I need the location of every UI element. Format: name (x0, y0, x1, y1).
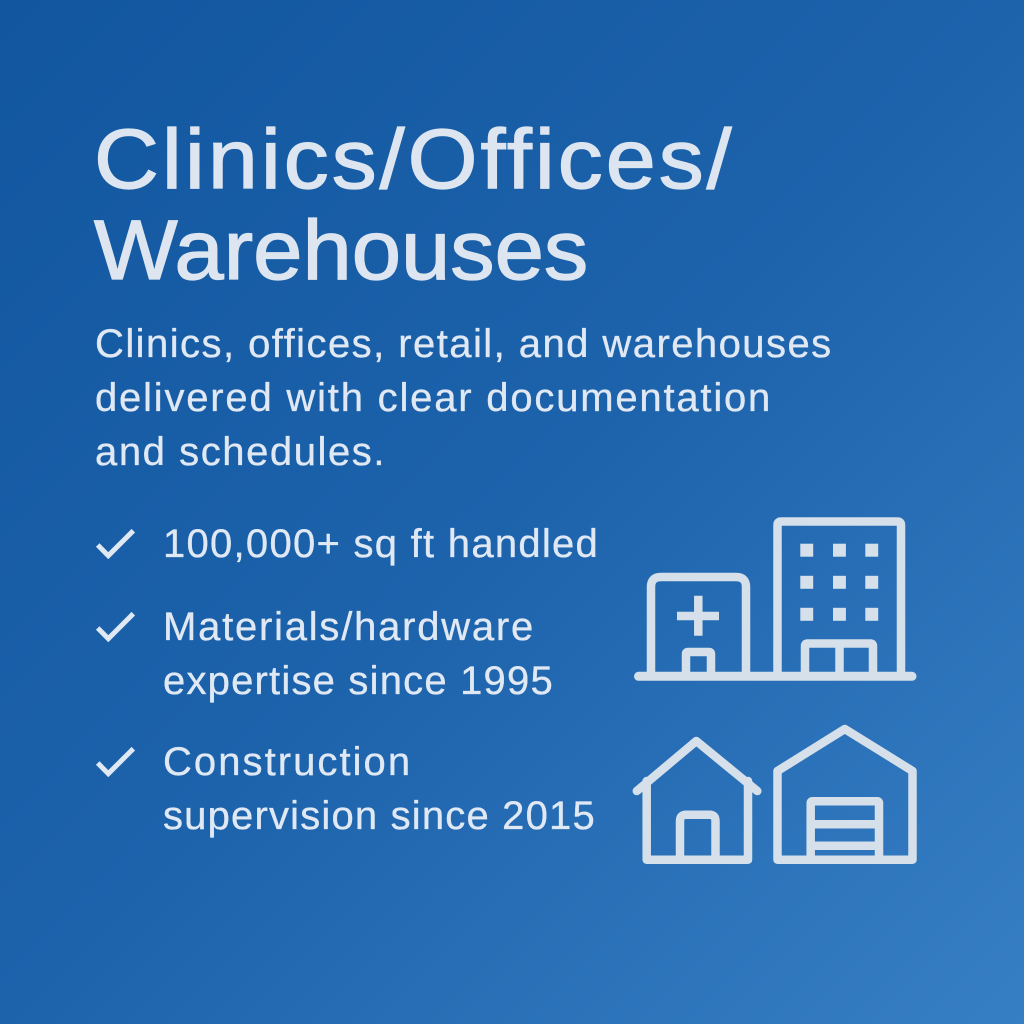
title: Clinics/Offices/ (94, 112, 735, 206)
description text: Clinics, offices, retail, and warehouses (95, 322, 833, 366)
icon: clinic (651, 577, 746, 676)
checklist item 3: supervision since 2015 (163, 794, 596, 838)
checklist item 1: 100,000+ sq ft handled (163, 522, 599, 566)
icon: check mark 1 (96, 528, 135, 559)
title (94, 112, 735, 297)
checklist item 2 (96, 605, 554, 703)
building icons (632, 517, 917, 864)
checklist item 2: Materials/hardware (163, 605, 535, 649)
icon: warehouse (778, 729, 912, 860)
description text: delivered with clear documentation (95, 376, 772, 420)
icon: house (637, 741, 757, 860)
description text: and schedules. (95, 430, 386, 474)
icon: office tower (778, 522, 901, 676)
checklist item 3: Construction (163, 740, 412, 784)
title: Warehouses (94, 203, 588, 297)
checklist item 2: expertise since 1995 (163, 659, 554, 703)
icon: check mark 2 (96, 612, 135, 642)
icon: check mark 3 (96, 746, 135, 777)
checklist item 3 (96, 740, 596, 838)
ground line (638, 672, 912, 681)
description text (95, 322, 833, 474)
